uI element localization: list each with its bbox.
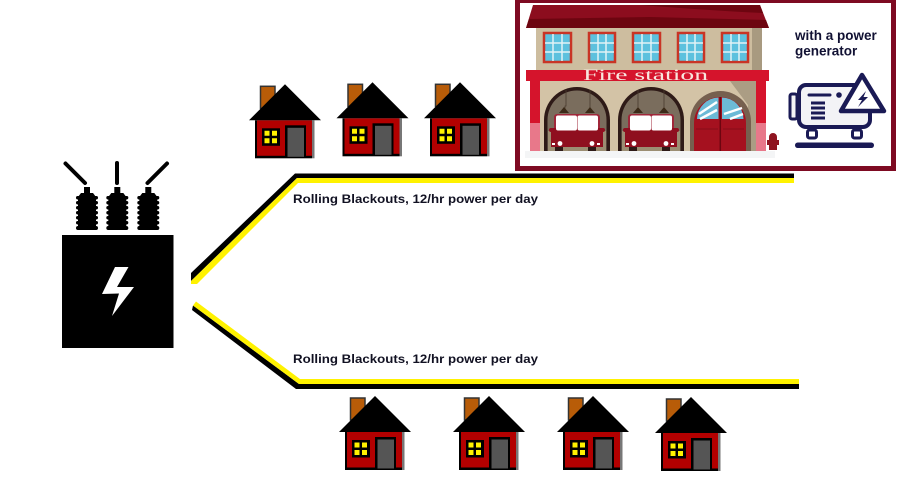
sign text: Fire station [583, 67, 708, 84]
panel: fire station with generator [518, 0, 894, 168]
icon: transformer [62, 163, 174, 348]
generator caption: with a power [794, 28, 878, 43]
icon: house bottom 2 [453, 396, 525, 470]
sign band [526, 70, 769, 81]
hydrant [767, 133, 779, 150]
generator caption: generator [795, 44, 858, 58]
fire truck 1 [549, 114, 605, 151]
garage bay 2 [618, 87, 684, 151]
roof [526, 5, 769, 28]
icon: house top 1 [249, 84, 321, 158]
window muntins [545, 34, 747, 61]
end cap [790, 94, 797, 119]
columns [530, 81, 540, 123]
icon: house bottom 1 [339, 396, 411, 470]
arched door [690, 91, 751, 151]
lightning bolt [102, 267, 134, 316]
transformer body [62, 235, 174, 348]
icon: house bottom 4 [655, 397, 727, 471]
base bar [795, 142, 874, 148]
warning triangle [841, 75, 884, 111]
control panel lines [809, 95, 830, 118]
ground strip [525, 151, 775, 158]
warning bolt [858, 91, 868, 107]
transformer insulators [76, 187, 159, 230]
icon: house bottom 3 [557, 396, 629, 470]
icon: power generator [790, 75, 884, 148]
engine body [799, 85, 870, 127]
fire truck 2 [623, 114, 679, 151]
power line: upper feeder [191, 174, 794, 284]
icon: house top 3 [424, 82, 496, 156]
panel frame [518, 0, 894, 168]
upper wall [536, 28, 762, 71]
fire station building [525, 5, 779, 158]
garage bay 1 [544, 87, 610, 151]
upper windows [544, 33, 748, 62]
lower wall [540, 81, 756, 151]
icon: house top 2 [336, 82, 408, 156]
label: upper line: Rolling Blackouts, 12/hr power per day [293, 192, 538, 206]
label: lower line: Rolling Blackouts, 12/hr power per day [293, 352, 538, 366]
power line: lower feeder [192, 302, 799, 389]
transformer leads [66, 163, 167, 183]
feet [808, 130, 816, 138]
indicator dot [836, 92, 842, 98]
